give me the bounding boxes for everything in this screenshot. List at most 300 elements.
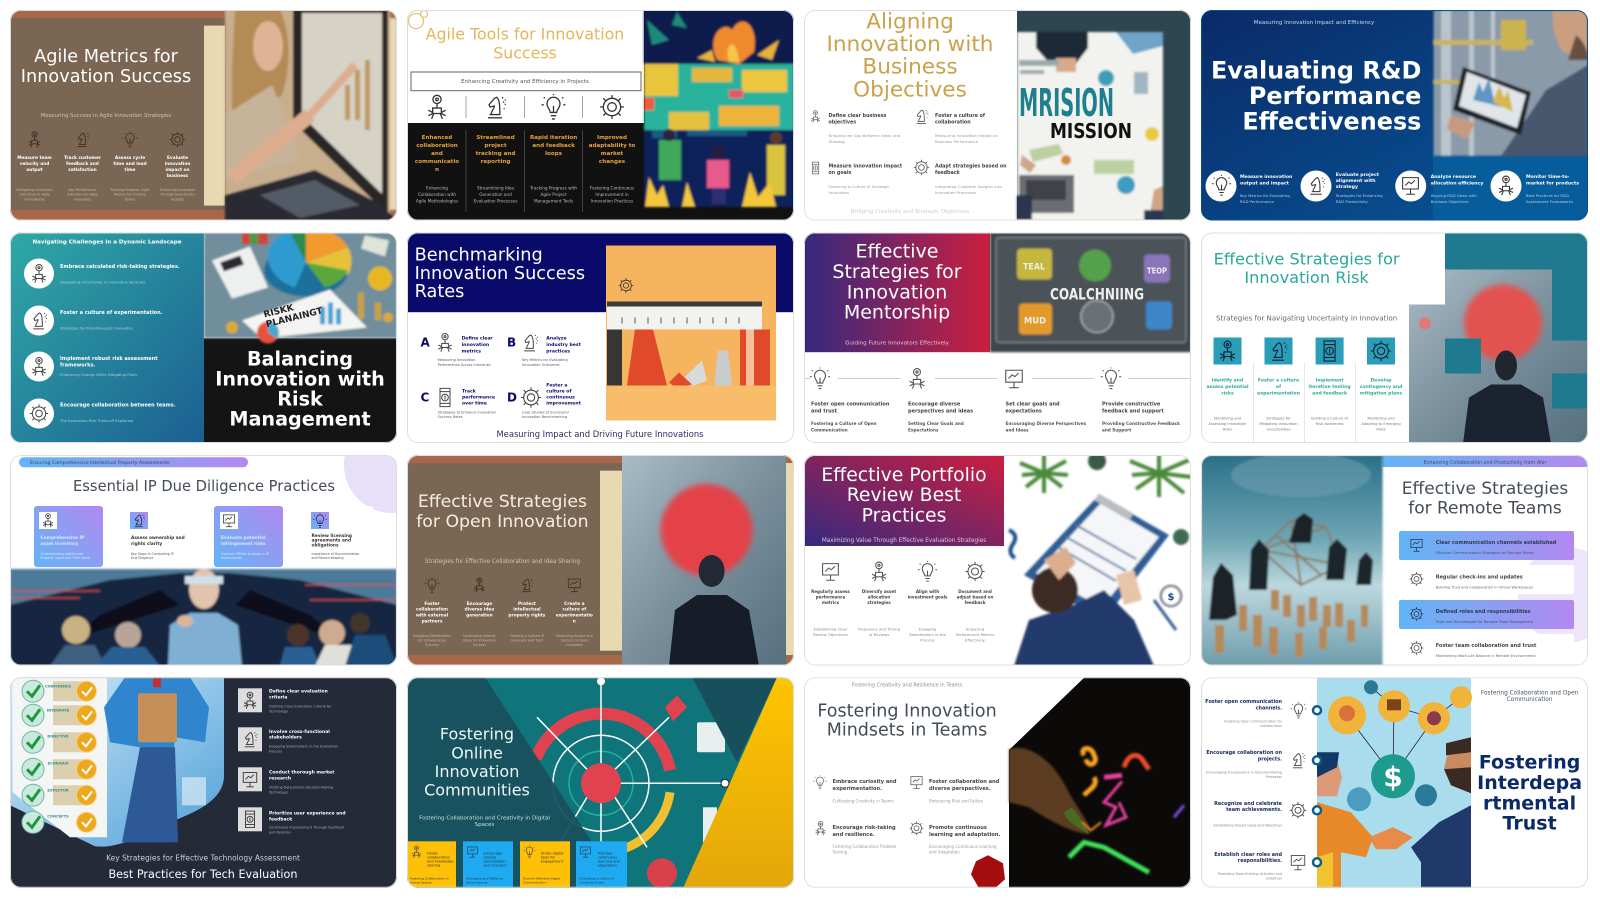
title: Effective Strategies for	[1214, 250, 1400, 268]
title: Fostering	[1479, 751, 1580, 773]
photo text: mission	[1020, 88, 1130, 138]
item: asset allocation: Frequency and Timing	[858, 626, 900, 632]
item: open communication: Fostering Open Communication for	[1224, 719, 1282, 723]
checklist labels: EXPECTOR	[47, 788, 69, 792]
item: resource allocation: allocation efficiency	[1431, 180, 1483, 186]
column headings: tracking and	[476, 151, 515, 157]
card: digital tools: Tools for Effective Digital	[523, 876, 560, 880]
card: diverse participation: and inclusion	[484, 863, 507, 867]
item: market research: research	[269, 775, 291, 781]
item: diverse perspectives: perspectives and ideas	[908, 408, 973, 414]
panel: dark background	[10, 677, 397, 888]
item: diverse perspectives: Setting Clear Goals and	[908, 421, 964, 426]
item: open communication: Communication	[811, 428, 848, 432]
column descriptions: Enhancing	[426, 186, 448, 190]
title: Strategies for	[832, 261, 962, 283]
item: project alignment: R&D Productivity	[1336, 199, 1369, 204]
panel: yellow diagonal	[683, 677, 794, 888]
card: knowledge sharing: collaboration	[427, 855, 450, 859]
row: communication channels: Clear communication channels established	[1436, 540, 1557, 546]
item: project alignment	[1300, 170, 1383, 204]
item: iterative testing: Implement	[1316, 378, 1344, 384]
title: Risk	[277, 388, 324, 410]
item: iterative testing	[1309, 338, 1351, 426]
item: asset allocation: strategies	[867, 600, 891, 605]
title: Aligning	[866, 9, 954, 34]
item: diverse perspectives	[908, 369, 973, 432]
item: collaboration on projects: projects.	[1258, 756, 1282, 762]
top and bottom terracotta bands	[407, 455, 794, 666]
item: customer feedback: satisfaction	[68, 167, 97, 173]
item: open communication: Collaboration	[1260, 724, 1282, 728]
card: ownership: Assess ownership and	[131, 536, 185, 541]
item: constructive feedback: feedback and support	[1102, 408, 1164, 414]
slide: Evaluating R&D Performance Effectiveness	[1201, 10, 1588, 221]
card: ownership: Key Steps in Conducting IP	[131, 552, 174, 556]
item C: Track	[462, 390, 476, 394]
item: customer feedback: Indicators for Agile	[67, 193, 98, 197]
row: team collaboration: Foster team collaboration and trust	[1436, 643, 1537, 649]
item: constructive feedback: Provide constructive	[1102, 402, 1160, 408]
card: continuous learning: adaptation	[598, 863, 617, 867]
column descriptions: Innovation Practices	[591, 198, 633, 204]
title: Best Practices for Tech Evaluation	[109, 868, 297, 881]
item: adapt strategies: feedback	[935, 170, 961, 176]
item: evaluation criteria: Technology	[268, 709, 288, 713]
item: market research: Conduct thorough market	[269, 770, 334, 775]
slide: Essential IP Due Diligence Practices	[10, 417, 440, 666]
item: constructive feedback: Providing Constructive Feedback	[1102, 421, 1180, 426]
card border	[10, 233, 396, 442]
item: risk-taking: Fostering Collaborative Problem	[832, 844, 896, 849]
card: licensing: agreements and	[312, 538, 351, 544]
slide: Effective Strategies for Open Innovation	[407, 455, 794, 666]
item: iterative testing: Building a Culture of	[1311, 416, 1348, 420]
item: clear roles	[1214, 852, 1321, 880]
item: continuous learning: Encouraging Continuous Learning	[929, 844, 997, 849]
item: business impact: Evaluate	[167, 156, 188, 161]
item: investment goals: Align with	[916, 589, 939, 594]
card: continuous learning: Creativity Online	[579, 880, 604, 884]
card border	[10, 678, 396, 887]
item: constructive feedback	[1101, 368, 1180, 432]
panel: white background	[804, 455, 1191, 666]
kicker: Fostering Creativity and Resilience in Teams	[852, 682, 963, 688]
subtitle box	[411, 72, 641, 91]
item: collaboration on projects: Encourage collaboration on	[1206, 750, 1282, 756]
title: for Open Innovation	[416, 512, 589, 532]
card: licensing	[305, 506, 373, 567]
column descriptions: Generation and	[479, 192, 512, 197]
item: culture of experimentation: Mitigating Innovation	[1259, 422, 1298, 426]
subtitle: Measuring Success in Agile Innovation Strategies	[41, 113, 171, 119]
item: contingency plans: contingency and	[1360, 384, 1402, 390]
panel: navy header	[407, 232, 794, 312]
card: digital tools: Communication	[523, 880, 547, 884]
card border	[1202, 678, 1588, 887]
item: time to market: Assessment Frameworks	[1526, 199, 1573, 204]
item: cross-functional: Process	[269, 749, 282, 753]
title: Mentorship	[844, 302, 950, 324]
item: time to market	[1490, 170, 1579, 204]
item: property rights: Protect	[518, 602, 536, 607]
item: customer feedback: Key Performance	[69, 188, 96, 192]
item B: industry best	[546, 342, 582, 348]
row: team collaboration	[1399, 634, 1574, 663]
title: Effective Portfolio	[821, 465, 987, 486]
item: property rights: Openness and Trust	[511, 638, 544, 642]
row: check-ins	[1399, 565, 1574, 594]
item: diverse ideas	[463, 578, 496, 647]
photo: coaching chalkboard	[990, 232, 1191, 352]
title: for Remote Teams	[1408, 498, 1562, 518]
item: culture of experimentation: experimentation	[1257, 390, 1300, 396]
item: resource allocation: Aligning R&D Goals with	[1431, 193, 1477, 198]
photo text: mission: MISSION	[1050, 119, 1132, 143]
panel: blue gradient background	[1201, 10, 1588, 221]
title: Objectives	[853, 77, 967, 102]
item: customer feedback: feedback and	[66, 161, 99, 167]
item: innovation output: Measure innovation	[1240, 175, 1292, 180]
item: culture of experimentation: Strategies for	[1266, 416, 1291, 420]
item A: A	[420, 336, 430, 350]
item: property rights: property rights	[508, 612, 546, 618]
row: communication channels	[1399, 531, 1574, 560]
title: Benchmarking	[415, 246, 543, 266]
photo: woman pointing at monitor	[225, 10, 397, 221]
card: diverse participation: Strategies and Platforms	[466, 876, 503, 880]
slide: Effective Strategies for Innovation Risk	[1201, 232, 1588, 444]
card: digital tools: engagement	[541, 859, 564, 863]
item: innovation output	[1206, 170, 1292, 204]
column descriptions: Management Tools	[534, 198, 573, 204]
item B: Key Metrics for Evaluating	[522, 358, 568, 362]
title: Business	[862, 55, 958, 80]
item: open communication: Fostering a Culture of Open	[811, 421, 876, 426]
item: external partners: Success	[425, 643, 439, 647]
item: business impact	[159, 132, 195, 201]
item: business impact: Insights	[171, 197, 184, 201]
title: Trust	[1503, 812, 1557, 834]
item D	[507, 382, 582, 419]
card: digital tools	[520, 841, 570, 888]
footer caption: Measuring Impact and Driving Future Innovations	[496, 429, 704, 439]
panel: white background	[10, 455, 397, 666]
item: diverse ideas: Ideas for Innovation	[463, 638, 496, 642]
checklist labels: DIRECTIVE	[47, 734, 69, 738]
subtitle: Maximizing Value Through Effective Evaluation Strategies	[822, 538, 986, 544]
item: property rights: Creating a Culture of	[510, 634, 544, 638]
checklist labels	[45, 684, 72, 818]
item: cycle time: time	[125, 167, 136, 173]
panel: white background	[804, 10, 1017, 221]
item: contingency plans: Adapting to Emerging	[1361, 422, 1401, 426]
item A: innovation	[462, 342, 489, 348]
checklist labels: CONCEPTS	[47, 814, 69, 818]
item: culture of experimentation	[1257, 338, 1300, 432]
item: adjust on feedback: feedback	[964, 600, 986, 605]
item: culture of experimentation: Uncertainties	[1267, 428, 1291, 432]
item: market research	[238, 767, 335, 794]
item: business impact: innovation	[165, 161, 190, 167]
card border	[408, 456, 794, 665]
item: team velocity: output	[26, 167, 43, 173]
item: identify risks: Risks	[1223, 428, 1232, 432]
item: culture of experimentation: of	[1276, 384, 1282, 390]
item: risk-taking	[816, 822, 897, 854]
item: experimentation: Strategies for Risk-Managed Innovation	[60, 326, 134, 330]
row: check-ins: Regular check-ins and updates	[1436, 574, 1523, 580]
item: cycle time: Tracking Progress: Agile	[110, 188, 150, 192]
photo: reviewing clipboard	[1009, 452, 1191, 666]
top and bottom terracotta bands	[10, 10, 397, 221]
dollar badge: $	[1168, 592, 1175, 603]
item C: over time	[462, 400, 487, 406]
item: clear roles: Promoting Team-Building Activities and	[1218, 872, 1282, 876]
illustration: ruler and shapes on orange	[606, 246, 776, 420]
item: diverse perspectives: Expectations	[908, 428, 939, 432]
item: risk-taking: Solving	[832, 849, 848, 854]
item: contingency plans: Monitoring and	[1367, 416, 1395, 420]
card: knowledge sharing	[408, 841, 456, 888]
item: cycle time: Assess cycle	[115, 156, 145, 161]
item: clear roles: responsibilities.	[1238, 858, 1282, 864]
item: evaluation criteria: Defining Clear Evaluation Criteria for	[269, 704, 332, 708]
row: team collaboration: Maintaining Work-Life Balance in Remote Environments	[1436, 654, 1536, 658]
item: experimentation	[24, 306, 163, 336]
card: asset inventory	[34, 506, 103, 567]
card border	[10, 10, 396, 220]
kicker band	[1382, 455, 1588, 467]
subtitle: Strategies for Navigating Uncertainty in Innovation	[1216, 314, 1397, 322]
subtitle: Strategies for Effective Collaboration and Idea Sharing	[425, 559, 580, 565]
item: cycle time: Metrics for Creative	[114, 193, 146, 197]
item: time to market: Monitor time-to-	[1526, 175, 1570, 180]
item: experimentation: culture of	[563, 606, 586, 612]
item: team velocity: Outcomes in Agile	[19, 193, 50, 197]
item: risk-taking: Encourage risk-taking	[832, 825, 896, 831]
item: open communication: Foster open communication	[811, 402, 889, 408]
item: curiosity	[814, 775, 897, 803]
item: continuous learning: learning and adaptation.	[929, 832, 1000, 838]
item: external partners: with external	[416, 612, 449, 618]
column descriptions: Fostering Continuous	[590, 186, 634, 190]
title: Innovation	[435, 762, 519, 781]
item: user experience: and Iteration	[269, 830, 291, 834]
decorative lavender circle	[344, 417, 440, 513]
title: rtmental	[1483, 792, 1576, 814]
item: clear roles: Initiatives	[1266, 876, 1282, 880]
item: risk assessment: Embracing Change While Mitigating Risks	[60, 373, 137, 377]
item D: Case Studies of Successful	[522, 410, 569, 414]
item: adapt strategies	[914, 160, 1007, 195]
item: team velocity: Frameworks	[25, 197, 45, 201]
item: diverse ideas: Success	[473, 643, 486, 647]
checklist rows	[22, 680, 96, 833]
board text: MUD	[1024, 316, 1046, 326]
title: Online	[451, 743, 503, 762]
column headings: n	[435, 167, 439, 173]
item: collaboration	[24, 398, 176, 428]
column headings: Improved	[597, 135, 627, 141]
item: performance metrics: metrics	[822, 600, 840, 605]
item: user experience: Prioritize user experience and	[269, 811, 346, 816]
item B	[507, 335, 582, 367]
slide: Balancing Innovation with Risk Management	[10, 232, 397, 444]
slide: Fostering Interdepartmental Trust	[1201, 677, 1588, 888]
item: project alignment: Strategies for Enhancing	[1336, 193, 1383, 198]
item: business objectives: Bridging the Gap Between Ideas and	[828, 133, 900, 138]
checklist labels: ECHNIQUE	[48, 761, 69, 765]
item C: C	[420, 390, 430, 404]
title: Effective Strategies	[418, 492, 587, 512]
card: asset inventory: asset inventory	[40, 541, 78, 547]
item: curiosity: Cultivating Creativity in Teams	[832, 798, 894, 803]
item: diverse perspectives: Embracing Risk and Failure	[929, 798, 984, 803]
card: knowledge sharing: sharing	[427, 863, 440, 867]
column headings: project	[484, 143, 507, 149]
card: knowledge sharing: Virtual Spaces	[410, 880, 432, 884]
item: market research: Techniques	[268, 790, 288, 794]
decorative rings	[408, 10, 428, 28]
item: external partners: Foster	[424, 602, 440, 607]
panel: teal background	[407, 677, 794, 888]
item: business objectives: Strategy	[828, 139, 846, 144]
panel: white background	[804, 677, 1191, 888]
card: continuous learning	[576, 841, 627, 888]
item: evaluation criteria: Define clear evaluation	[269, 689, 328, 694]
item: investment goals: Stakeholders in the	[909, 632, 947, 637]
card: digital tools: Utilize digital	[541, 851, 564, 855]
card: continuous learning: learning and	[598, 859, 620, 863]
kicker: Navigating Challenges in a Dynamic Landscape	[32, 240, 182, 246]
title: Mindsets in Teams	[827, 720, 987, 740]
item: open communication: Foster open communication	[1205, 699, 1282, 705]
item: asset allocation	[858, 562, 901, 637]
item: performance metrics: performance	[816, 594, 845, 600]
card: continuous learning: continuous	[598, 855, 617, 859]
item B: Innovation Outcomes	[522, 363, 560, 367]
kicker pill: Ensuring Comprehensive Intellectual Property Assessments	[30, 460, 170, 466]
item: project alignment: strategy	[1336, 184, 1358, 190]
item: identify risks: Identify and	[1212, 378, 1243, 384]
title: Evaluating R&D	[1211, 56, 1421, 84]
item: cross-functional	[238, 727, 338, 753]
title: Effectiveness	[1242, 107, 1421, 135]
beige side panel	[600, 471, 622, 651]
item: external partners: partners	[422, 618, 443, 624]
item: contingency plans: mitigation plans	[1360, 390, 1402, 396]
panel: teal gradient	[10, 232, 204, 444]
title: Agile Tools for Innovation	[426, 24, 624, 43]
item: clear goals: Encouraging Diverse Perspectives	[1006, 421, 1086, 426]
item: collaboration: The Innovation-Risk Trade-off Explained	[59, 419, 133, 423]
item: project alignment: alignment with	[1336, 178, 1376, 184]
item: clear goals: Set clear goals and	[1006, 402, 1060, 408]
item: adjust on feedback	[955, 562, 995, 642]
item: risk assessment	[24, 352, 158, 382]
icon row	[428, 94, 624, 119]
photo: man facing red sphere	[622, 455, 794, 666]
slide: Agile Tools for Innovation Success	[407, 10, 794, 221]
title: Innovation	[847, 282, 947, 304]
item: culture of collaboration: Business Performance	[935, 139, 979, 144]
timeline segments	[804, 378, 1191, 380]
card: asset inventory: Property Types and Their Value	[40, 556, 90, 560]
item: asset allocation: of Reviews	[869, 632, 889, 637]
item: asset allocation: Diversify asset	[862, 589, 896, 594]
card: licensing: Importance of Documentation	[312, 552, 359, 556]
item: diverse perspectives: Encourage diverse	[908, 402, 960, 408]
card: digital tools: tools for	[541, 855, 556, 859]
checklist labels: INTEGRATE	[47, 708, 70, 712]
item: team velocity	[16, 132, 53, 201]
board text: COALCHNIING	[1050, 284, 1144, 304]
slide: Fostering Innovation Mindsets in Teams	[804, 677, 1191, 888]
title: Communities	[424, 780, 530, 799]
card border	[804, 233, 1190, 442]
title: Performance	[1249, 82, 1421, 110]
item: evaluation criteria: criteria	[269, 694, 287, 700]
column descriptions: Agile Project	[541, 192, 567, 197]
item: cycle time: time and lead	[113, 161, 147, 167]
item: adjust on feedback: Performance Metrics	[955, 632, 995, 637]
item: team achievements: Establishing Shared Goals and Objectives	[1213, 823, 1282, 827]
item: diverse ideas: diverse idea	[465, 606, 494, 612]
column dividers	[1254, 362, 1356, 442]
row: communication channels: Effective Communication Strategies for Remote Teams	[1436, 551, 1534, 555]
item: collaboration: Encourage collaboration between teams.	[60, 402, 176, 408]
item: continuous learning: Promote continuous	[929, 825, 987, 831]
panel: white and black background	[407, 10, 794, 221]
title: Management	[229, 408, 371, 430]
item: business impact: business	[167, 173, 189, 179]
item: adjust on feedback: Document and	[958, 589, 992, 594]
item D: continuous	[546, 394, 575, 400]
kicker pill	[19, 457, 248, 467]
item: measure impact: Measure innovation impact	[828, 164, 902, 170]
title: Review Best	[847, 485, 961, 506]
photo: man facing red sphere	[1409, 270, 1588, 444]
illustration: handshake and dollar network	[1317, 677, 1472, 888]
item: diverse perspectives: diverse perspectives.	[929, 786, 991, 792]
item: cross-functional: Engaging Stakeholders in the Evaluation	[269, 744, 338, 748]
item: risk taking: Embrace calculated risk-taking strategies.	[60, 264, 180, 270]
item: adapt strategies: Adapt strategies based on	[935, 164, 1007, 170]
item: team velocity: Navigating Innovation	[16, 188, 53, 192]
slide: Best Practices for Tech Evaluation	[10, 677, 397, 888]
item: user experience: Continuous Improvement Through Feedback	[269, 825, 344, 829]
column headings: Enhanced	[422, 135, 452, 141]
item C: performance	[462, 394, 495, 400]
column headings: communicatio	[415, 159, 459, 165]
card: diverse participation	[463, 841, 513, 888]
column descriptions	[416, 186, 634, 204]
board text: TEOP	[1147, 266, 1167, 276]
item: diverse perspectives: Foster collaboration and	[929, 779, 999, 785]
panel: dark teal column	[1017, 10, 1191, 221]
kicker: Fostering Collaboration and Open	[1481, 690, 1578, 696]
card border	[804, 456, 1190, 665]
item D: Foster a	[546, 384, 567, 388]
item: clear goals: expectations	[1006, 408, 1042, 414]
item: continuous learning: and Adaptation	[929, 849, 960, 854]
card border	[1202, 233, 1588, 442]
panel: white background	[1201, 455, 1588, 666]
title: Effective	[856, 240, 938, 262]
illustration: team at kanban board	[644, 10, 794, 207]
illustration: handshake and dollar network: $	[1383, 760, 1403, 793]
